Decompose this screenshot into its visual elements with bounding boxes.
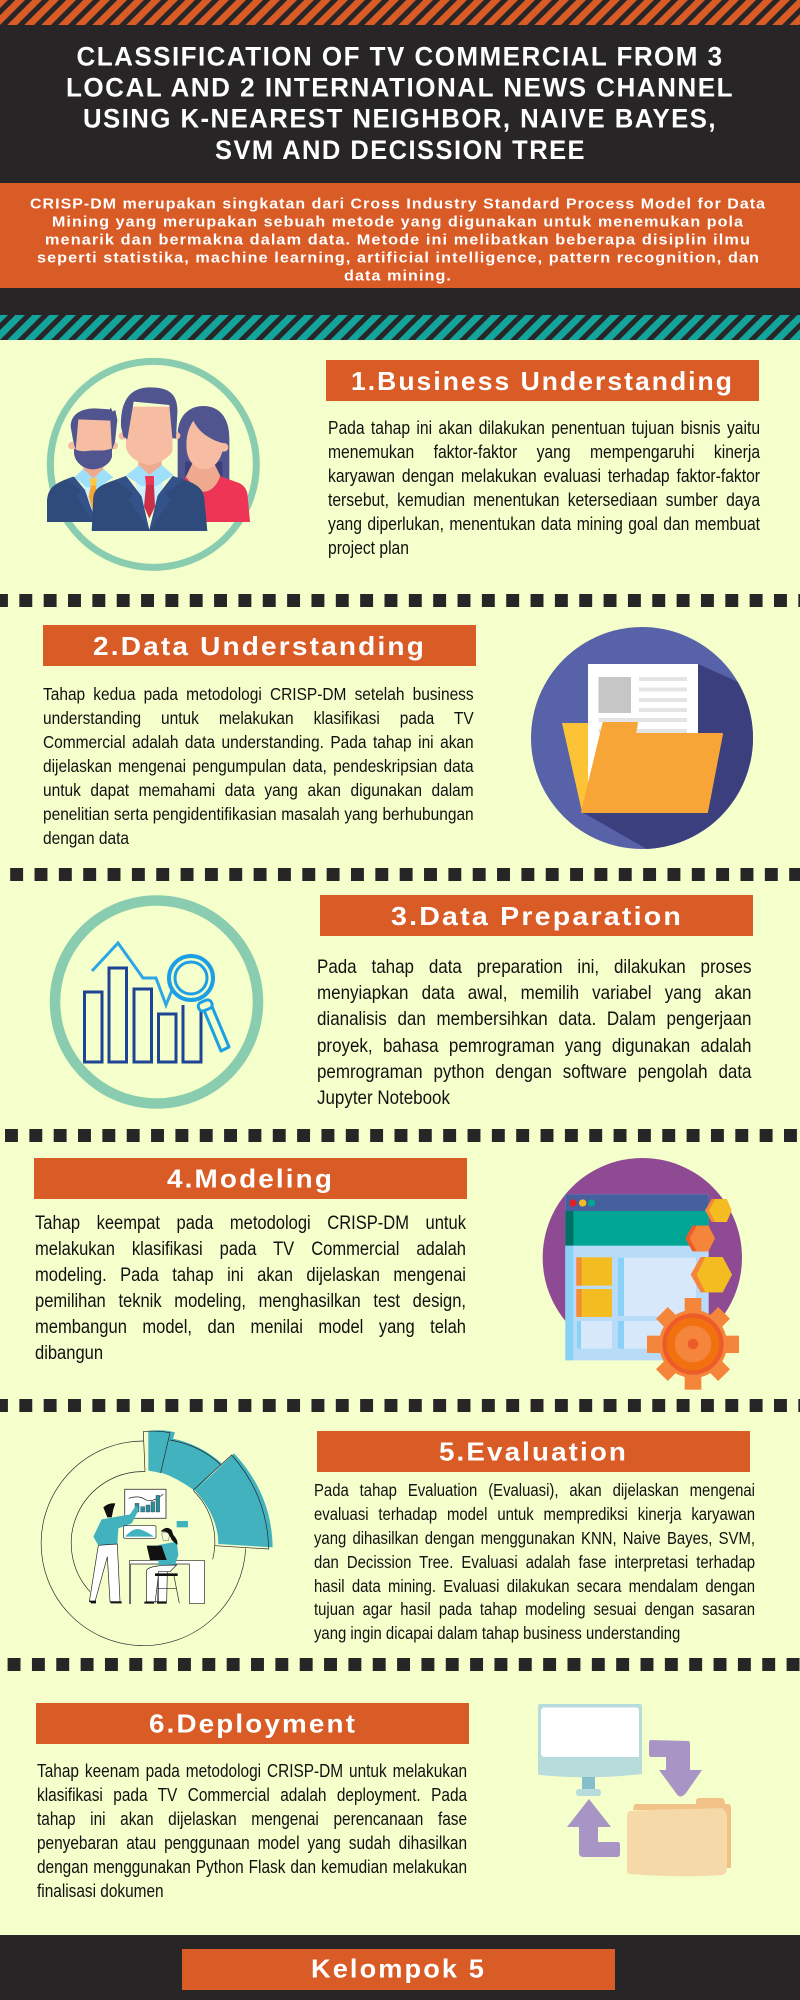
text: data preparation: proyek, bahasa pemrograman yang digunakan adalah: [317, 1035, 751, 1057]
title: CLASSIFICATION OF TV COMMERCIAL FROM 3: [76, 42, 724, 72]
text: evaluation: hasil data mining. Evaluasi dilakukan secara mendalam dengan: [314, 1577, 755, 1596]
text: evaluation: tujuan agar hasil pada tahap modeling sesuai dengan sasaran: [314, 1600, 755, 1619]
text: modeling: modeling. Pada tahap ini akan dijelaskan mengenai: [35, 1265, 466, 1286]
panel: CRISP-DM intro: [0, 183, 800, 288]
text: modeling: melakukan klasifikasi pada TV Commercial adalah: [35, 1239, 466, 1260]
text: data understanding: dijelaskan mengenai pengumpulan data, pendeskripsian data: [43, 756, 474, 776]
title: SVM AND DECISSION TREE: [215, 135, 586, 165]
top orange diagonal stripe: [0, 0, 800, 25]
heading: 5.Evaluation: 5.Evaluation: [439, 1437, 628, 1467]
footer label: Kelompok 5: Kelompok 5: [311, 1954, 486, 1984]
text: business understanding: karyawan dengan melakukan evaluasi terhadap faktor-faktor: [328, 466, 760, 486]
text: business understanding: yang diperlukan, menentukan data mining goal dan membuat: [328, 514, 760, 534]
icon: people evaluating charts in pie ring: [40, 1430, 273, 1646]
text: modeling: dibangun: [35, 1343, 103, 1364]
text: data understanding: penelitian serta pengidentifikasian masalah yang berhubungan: [43, 804, 474, 824]
title: LOCAL AND 2 INTERNATIONAL NEWS CHANNEL: [66, 73, 734, 103]
divider 5: [0, 1658, 800, 1671]
icon: chart and magnifier in ring: [50, 895, 264, 1109]
divider 4: [0, 1399, 800, 1412]
panel: CRISP-DM intro: menarik dan bermakna dalam data. Metode ini melibatkan beberapa disiplin ilmu: [45, 231, 751, 248]
text: deployment: tahap ini akan dijelaskan mengenai perencanaan fase: [37, 1809, 467, 1829]
title: [66, 42, 734, 165]
panel: CRISP-DM intro: CRISP-DM merupakan singkatan dari Cross Industry Standard Process Model for Data: [30, 195, 766, 212]
text: deployment: [37, 1761, 468, 1901]
text: data preparation: menyiapkan data awal, memilih variabel yang akan: [317, 982, 751, 1004]
icon: business team in ring: [46, 358, 260, 571]
text: evaluation: evaluasi terhadap model untuk memprediksi kinerja karyawan: [314, 1505, 755, 1524]
text: business understanding: menemukan faktor-faktor yang mempengaruhi kinerja: [328, 442, 760, 462]
heading: 3.Data Preparation: 3.Data Preparation: [391, 901, 683, 931]
heading: 2.Data Understanding: 2.Data Understanding: [93, 631, 426, 661]
heading: 4.Modeling: 4.Modeling: [167, 1164, 334, 1194]
text: deployment: finalisasi dokumen: [37, 1881, 164, 1901]
heading: 4.Modeling: [34, 1158, 467, 1199]
text: evaluation: yang dihasilkan dengan menggunakan KNN, Naive Bayes, SVM,: [314, 1529, 755, 1548]
heading: 1.Business Understanding: 1.Business Understanding: [351, 366, 734, 396]
text: data preparation: dianalisis dan membersihkan data. Dalam pengerjaan: [317, 1008, 751, 1030]
heading: 5.Evaluation: [317, 1431, 750, 1472]
text: deployment: Tahap keenam pada metodologi CRISP-DM untuk melakukan: [37, 1761, 467, 1781]
teal diagonal stripe: [0, 315, 800, 340]
text: evaluation: [314, 1481, 755, 1643]
heading: 6.Deployment: 6.Deployment: [149, 1709, 357, 1739]
icon: folder with document: [531, 627, 753, 849]
panel: CRISP-DM intro: seperti statistika, machine learning, artificial intelligence, pattern recognition, dan: [37, 249, 760, 266]
text: deployment: dengan menggunakan Python Flask dan kemudian melakukan: [37, 1857, 467, 1877]
text: business understanding: [328, 418, 760, 558]
text: data understanding: dengan data: [43, 828, 129, 848]
text: evaluation: dan Decission Tree. Evaluasi adalah fase interpretasi terhadap: [314, 1553, 755, 1572]
text: modeling: Tahap keempat pada metodologi CRISP-DM untuk: [35, 1213, 466, 1234]
heading: 6.Deployment: [36, 1703, 469, 1744]
divider 3: [0, 1129, 800, 1142]
text: business understanding: tersebut, kemudian menentukan ketersediaan sumber daya: [328, 490, 760, 510]
top dark header block: [0, 0, 800, 315]
heading: 3.Data Preparation: [320, 895, 753, 936]
text: evaluation: yang ingin dicapai dalam tahap business understanding: [314, 1624, 680, 1643]
text: business understanding: project plan: [328, 538, 409, 558]
heading: 1.Business Understanding: [326, 360, 759, 401]
text: deployment: penyebaran atau penggunaan model yang sudah dihasilkan: [37, 1833, 467, 1853]
text: modeling: membangun model, dan menilai model yang telah: [35, 1317, 466, 1338]
footer band: [0, 1935, 800, 2000]
text: data preparation: [317, 956, 752, 1109]
icon: monitor and folder with transfer arrows: [538, 1704, 731, 1876]
panel: CRISP-DM intro: Mining yang merupakan sebuah metode yang digunakan untuk menemukan pola: [52, 214, 744, 231]
text: data understanding: untuk dapat memahami data yang akan digunakan dalam: [43, 780, 474, 800]
heading: 2.Data Understanding: [43, 625, 476, 666]
text: data preparation: pemrograman python dengan software pengolah data: [317, 1061, 751, 1083]
text: evaluation: Pada tahap Evaluation (Evaluasi), akan dijelaskan mengenai: [314, 1481, 755, 1500]
title: USING K-NEAREST NEIGHBOR, NAIVE BAYES,: [83, 104, 717, 134]
text: data understanding: Commercial adalah data understanding. Pada tahap ini akan: [43, 732, 474, 752]
divider 2: [0, 868, 800, 881]
text: data understanding: understanding untuk melakukan klasifikasi pada TV: [43, 708, 474, 728]
text: data understanding: [43, 684, 474, 848]
text: data understanding: Tahap kedua pada metodologi CRISP-DM setelah business: [43, 684, 474, 704]
panel: CRISP-DM intro: data mining.: [344, 267, 452, 284]
text: deployment: klasifikasi pada TV Commercial adalah deployment. Pada: [37, 1785, 467, 1805]
text: data preparation: Jupyter Notebook: [317, 1087, 450, 1109]
text: business understanding: Pada tahap ini akan dilakukan penentuan tujuan bisnis yaitu: [328, 418, 760, 438]
text: modeling: [35, 1213, 466, 1364]
footer label: Kelompok 5: [182, 1949, 615, 1990]
divider 1: [0, 594, 800, 607]
text: modeling: pemilihan teknik modeling, menghasilkan test design,: [35, 1291, 466, 1312]
icon: app window with gear: [542, 1158, 742, 1390]
text: data preparation: Pada tahap data preparation ini, dilakukan proses: [317, 956, 751, 978]
